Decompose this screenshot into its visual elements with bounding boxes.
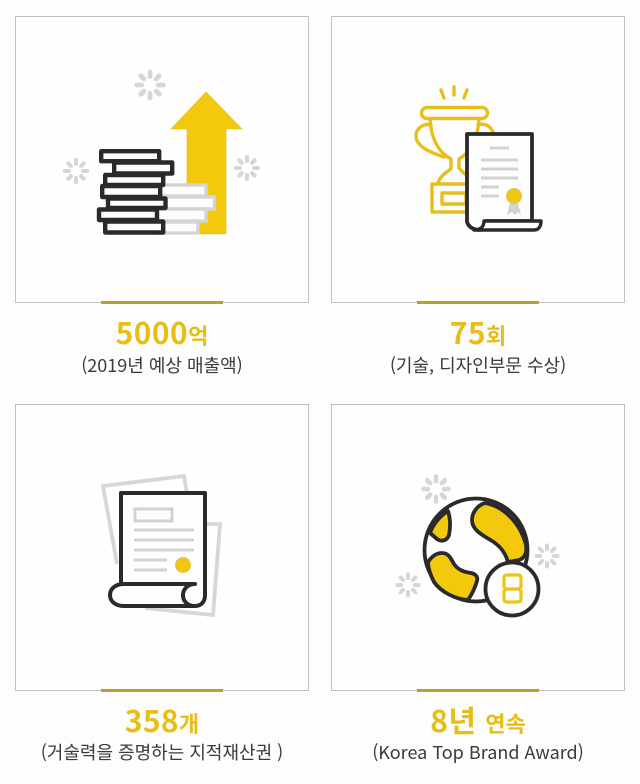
caption: brand award: (Korea Top Brand Award) <box>372 739 584 765</box>
certificate text lines <box>481 148 518 196</box>
panel: revenue card <box>15 16 309 303</box>
icon: sparkle left <box>397 574 419 596</box>
gold seal <box>176 558 190 572</box>
accent bar: awards <box>417 301 539 304</box>
icon: sparkle left <box>65 160 87 182</box>
badge number 8 <box>504 575 521 602</box>
stat: brand award value: 8년 연속 <box>430 697 526 741</box>
icon: coins and rising arrow <box>65 72 258 234</box>
caption: patents: (거술력을 증명하는 지적재산권 ) <box>41 739 283 765</box>
icon: sparkle top <box>424 476 448 502</box>
ribbon <box>507 203 521 215</box>
panel: patents card <box>15 404 309 691</box>
icon: sparkle top <box>137 72 163 98</box>
stat: revenue value: 5000억 <box>116 309 208 353</box>
gold seal <box>506 188 522 204</box>
accent bar: patents <box>101 689 223 692</box>
icon: sparkle right <box>236 157 258 179</box>
caption: awards: (기술, 디자인부문 수상) <box>390 352 566 378</box>
icon: globe with 8 badge <box>397 476 558 616</box>
grey back sheets <box>103 476 220 615</box>
title box <box>135 509 172 521</box>
certificate curl <box>474 221 541 230</box>
document sheet <box>121 493 205 606</box>
badge <box>486 562 538 616</box>
icon: patent documents <box>103 476 220 615</box>
text lines <box>134 530 194 570</box>
black coin stack <box>99 151 172 232</box>
icon: trophy and certificate <box>416 87 541 230</box>
certificate sheet <box>467 134 532 230</box>
accent bar: revenue <box>101 301 223 304</box>
icon: sparkle right <box>536 545 558 567</box>
icon: yellow arrow <box>171 92 242 234</box>
stat: awards value: 75회 <box>450 309 506 353</box>
icon: gold trophy <box>416 87 493 212</box>
stat: patents value: 358개 <box>125 697 199 741</box>
caption: revenue: (2019년 예상 매출액) <box>81 352 243 378</box>
accent bar: brand award <box>417 689 539 692</box>
panel: awards card <box>331 16 625 303</box>
panel: brand award card <box>331 404 625 691</box>
document roll <box>110 584 195 606</box>
grey coin stack <box>150 185 214 233</box>
continents <box>428 503 526 600</box>
globe outline <box>424 498 528 602</box>
